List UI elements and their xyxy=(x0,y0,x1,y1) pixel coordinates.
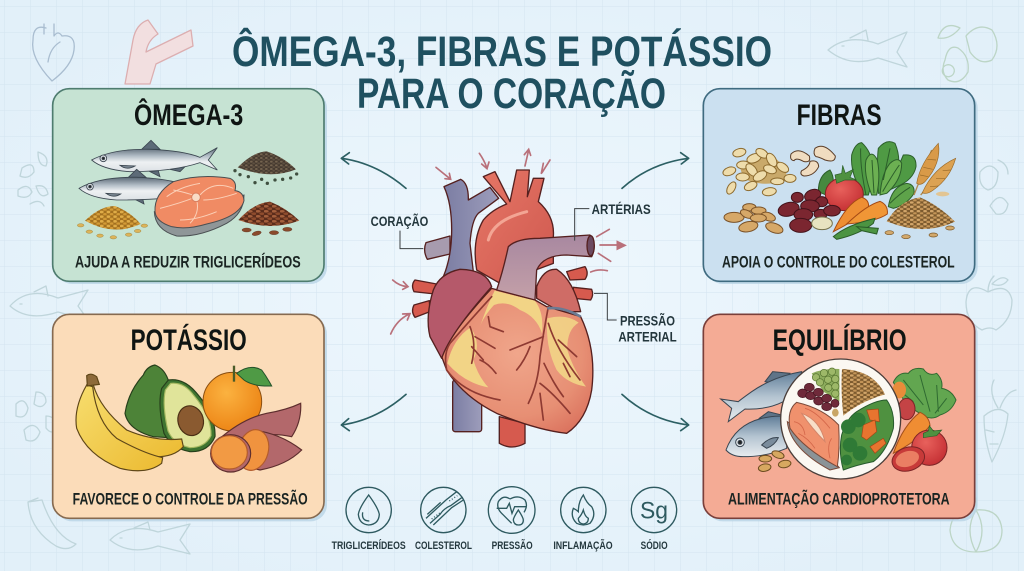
icon: outline carrot right xyxy=(984,380,1016,462)
plate: peas and beans xyxy=(798,368,839,417)
arrow: to fibras panel xyxy=(622,153,689,188)
icon: golden seed pile xyxy=(77,206,148,239)
caption: equilíbrio: ALIMENTAÇÃO CARDIOPROTETORA xyxy=(728,488,950,508)
caption: omega-3: AJUDA A REDUZIR TRIGLICERÍDEOS xyxy=(75,252,301,271)
icon: triglycerides drop xyxy=(346,487,391,533)
icon: salmon steak xyxy=(154,176,244,236)
heart: fat patches xyxy=(447,291,586,387)
icon: carrots and pods xyxy=(833,197,887,239)
icon: red beans xyxy=(777,187,840,232)
icon: inflammation flame xyxy=(561,487,606,533)
title line 1: ÔMEGA-3, FIBRAS E POTÁSSIO xyxy=(232,27,772,76)
icon: outline seeds left xyxy=(18,152,48,206)
label: colesterol: COLESTEROL xyxy=(415,540,472,552)
heart: pulmonary artery xyxy=(497,235,594,300)
icon: orange xyxy=(203,366,272,431)
icon: outline banana xyxy=(28,498,76,549)
heart: vena cava stub xyxy=(425,236,450,259)
label: sódio: SÓDIO xyxy=(641,539,668,552)
icon: flaxseed pile xyxy=(238,202,299,236)
heart: left atrium xyxy=(537,269,581,312)
icon: fish xyxy=(721,372,802,457)
icon: outline fish bottom xyxy=(110,522,190,554)
arrow: to equilíbrio panel xyxy=(622,394,689,431)
heart: left pulmonary stubs xyxy=(413,280,437,317)
icon: outline avocado and fruit xyxy=(938,26,997,82)
icon: greens and tomato xyxy=(889,368,956,475)
label: triglicerídeos: TRIGLICERÍDEOS xyxy=(332,539,406,552)
icon: avocado xyxy=(125,365,215,452)
icon: small beans xyxy=(758,449,792,472)
icon: bananas xyxy=(76,374,183,471)
arrow: to ômega-3 panel xyxy=(341,153,406,188)
heading: fibras: FIBRAS xyxy=(797,99,882,132)
icon: outline seeds right xyxy=(980,160,1008,214)
heading: potássio: POTÁSSIO xyxy=(131,323,247,357)
heart illustration with labels and arrows xyxy=(341,149,689,447)
panel: fibras xyxy=(703,89,978,284)
heart: aorta xyxy=(475,170,553,283)
leader: pressão arterial xyxy=(594,293,617,320)
icon: outline fish top right xyxy=(828,30,907,67)
icon: outline apple right xyxy=(966,276,1012,330)
label: pressão arterial xyxy=(618,311,677,344)
panel: omega-3 xyxy=(53,89,327,284)
plate: broccoli and vegetables xyxy=(840,400,894,470)
caption: potássio: FAVORECE O CONTROLE DA PRESSÃO xyxy=(73,488,308,508)
plate: whole grains xyxy=(842,369,885,416)
heart: coronary vessels xyxy=(446,297,580,420)
leader: coração xyxy=(400,231,423,249)
icon: outline pumpkin xyxy=(950,498,1002,552)
icon: sodium symbol xyxy=(631,487,677,533)
icon: greens xyxy=(851,142,916,208)
label: artérias: ARTÉRIAS xyxy=(592,201,651,217)
label: pressão arterial: PRESSÃO xyxy=(620,311,675,328)
heart: groove xyxy=(547,308,581,317)
icon: sodium symbol: Sg xyxy=(640,497,668,524)
icon row: risk factors xyxy=(332,487,677,552)
label: pressão: PRESSÃO xyxy=(492,539,533,552)
label: coração: CORAÇÃO xyxy=(371,212,428,229)
icon: outline fish left xyxy=(10,286,88,320)
heading: omega-3: ÔMEGA-3 xyxy=(134,98,243,132)
heart: superior vena cava xyxy=(443,179,499,277)
leader: artérias xyxy=(575,209,589,241)
icon: outline artery xyxy=(125,20,193,84)
icon: cholesterol artery xyxy=(421,487,466,533)
icon: oats xyxy=(722,147,796,197)
heading: equilíbrio: EQUILÍBRIO xyxy=(773,323,907,357)
heart: descending aorta xyxy=(499,417,525,447)
icon: tomato xyxy=(818,165,863,211)
heart: inferior vena cava xyxy=(453,380,482,432)
heart: ventricles xyxy=(442,288,593,433)
icon: plate xyxy=(781,359,901,479)
plate: salmon xyxy=(787,402,839,470)
title xyxy=(232,27,772,118)
icon: wheat xyxy=(914,143,956,196)
icon: brown beans lower left xyxy=(724,204,784,235)
heart: aortic highlight xyxy=(488,212,527,240)
icon: outline heart xyxy=(33,24,74,81)
panel: potássio xyxy=(53,314,327,521)
icon: sardines xyxy=(79,140,217,204)
heart xyxy=(413,170,594,447)
arrow: to potássio panel xyxy=(341,394,406,431)
icon: outline seeds and leaves left xyxy=(16,392,58,441)
arrows: pink blood flow xyxy=(391,149,625,334)
icon: white beans xyxy=(791,146,835,176)
label: inflamação: INFLAMAÇÃO xyxy=(553,539,613,552)
title line 2: PARA O CORAÇÃO xyxy=(357,70,666,118)
icon: blood pressure heart xyxy=(488,487,535,533)
icon: dark seed pile xyxy=(233,151,298,185)
heart: right atrium xyxy=(428,269,492,358)
icon: sweet potato xyxy=(211,403,302,474)
panel: equilíbrio xyxy=(703,314,978,521)
heart: right pulmonary vein stubs xyxy=(567,267,593,300)
icon: grain pile xyxy=(885,197,955,239)
label: pressão arterial: ARTERIAL xyxy=(618,328,677,344)
